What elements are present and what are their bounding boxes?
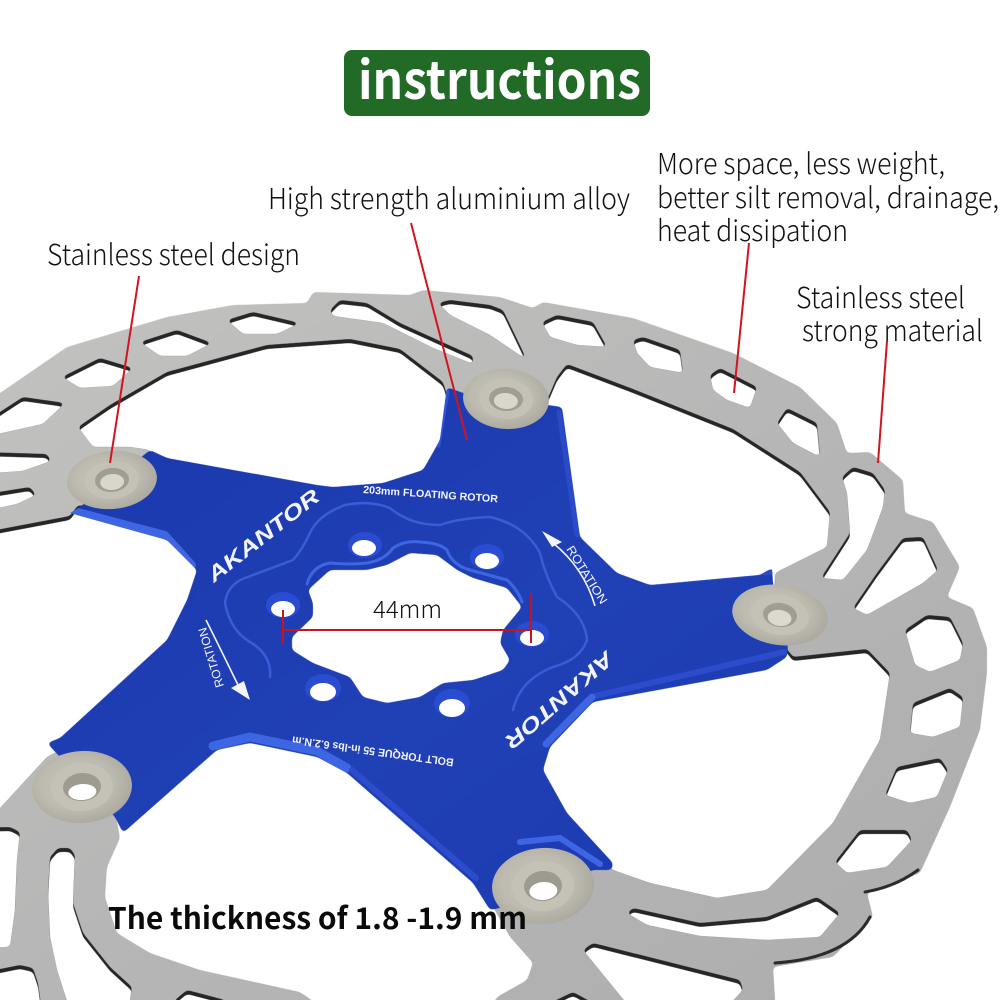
label: rotation right: ROTATION: [563, 543, 610, 607]
callout: more space, less weight: More space, less weight,: [657, 141, 945, 183]
label: rotation left: ROTATION: [195, 626, 227, 689]
callout: stainless steel strong material: strong material: [802, 308, 983, 350]
washer D: [489, 845, 597, 927]
washer E: [30, 748, 134, 826]
machined highlights on spider edges: [74, 392, 784, 878]
label: AKANTOR bottom: AKANTOR: [499, 645, 619, 754]
label: bolt torque: BOLT TORQUE 55 in-lbs 6.2.N.m: [291, 733, 454, 768]
bolt holes: [266, 532, 549, 717]
callout: stainless steel strong material: [796, 275, 983, 463]
blue aluminium five-arm spider: [47, 387, 788, 910]
washer C: [728, 579, 832, 651]
rotor: stainless steel disc: [0, 290, 987, 1000]
outer hub ridge: [225, 503, 587, 710]
large cut-outs and rim holes with dark upper edges: [0, 300, 963, 1000]
callout: stainless steel design: [47, 232, 300, 463]
label: 203mm floating rotor: 203mm FLOATING ROTOR: [363, 484, 499, 505]
bottom cut-out and hub opening: [105, 533, 537, 1000]
inner hole lip: [307, 542, 522, 602]
callout: stainless steel design: Stainless steel design: [47, 232, 300, 274]
callout: more space, less weight: [657, 141, 999, 393]
arrow: rotation left: [206, 620, 250, 700]
dimension: 44mm: [283, 590, 531, 643]
washers: [30, 366, 832, 927]
title badge: instructions: [358, 39, 641, 114]
dark outer-edge shadows on the rim: [775, 870, 918, 963]
rotor outer silhouette: [0, 290, 987, 1000]
hub ridges: [225, 503, 587, 710]
arrow: rotation right: [542, 531, 595, 606]
washer A: [65, 447, 159, 513]
thickness note: The thickness of 1.8 -1.9 mm: [108, 894, 527, 938]
callout: stainless steel strong material: Stainless steel: [796, 275, 965, 317]
callout: high strength aluminium alloy: High strength aluminium alloy: [268, 176, 630, 218]
callout: more space, less weight: heat dissipation: [657, 208, 848, 250]
dimension: 44mm: 44mm: [373, 590, 442, 625]
label: AKANTOR top: AKANTOR: [202, 484, 325, 588]
callout: high strength aluminium alloy: [268, 176, 630, 440]
spider body: [47, 387, 788, 910]
washer B: [461, 366, 551, 432]
